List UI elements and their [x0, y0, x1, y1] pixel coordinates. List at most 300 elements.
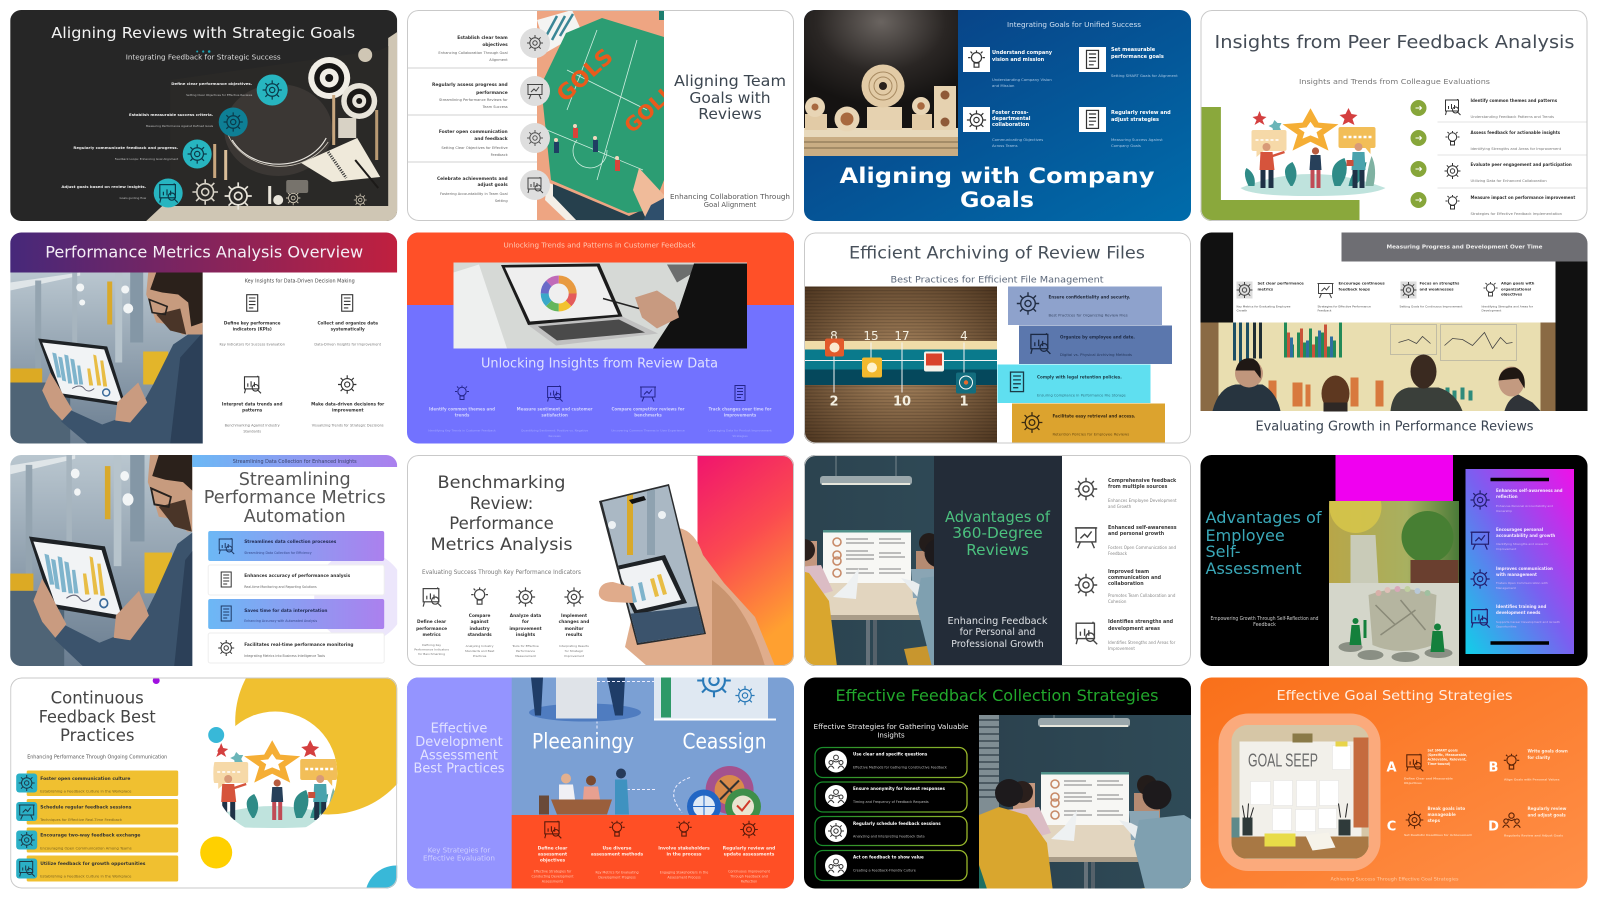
card: time savings: Enhancing Accuracy with Automated Analysis — [244, 619, 317, 623]
goal list: Streamlining Performance Reviews for — [439, 98, 508, 102]
header band — [10, 232, 397, 272]
header text: Measuring Progress and Development Over Time — [1386, 244, 1543, 250]
practice list: Assessments — [542, 880, 564, 884]
card: confidentiality — [1008, 286, 1162, 325]
metric list: industry — [469, 626, 490, 632]
card: open culture: Establishing a Feedback Culture in the Workplace — [40, 790, 132, 794]
letters: B — [1489, 760, 1498, 776]
insight list: Track changes over time for — [709, 406, 772, 412]
practice list: Reflection — [741, 880, 757, 884]
card: confidentiality: Ensure confidentiality and security. — [1048, 294, 1131, 300]
card: confidentiality: Best Practices for Organizing Review Files — [1048, 312, 1128, 318]
slide: Efficient Archiving of Review Files — [804, 232, 1191, 444]
black frame blocks — [1200, 232, 1588, 411]
illustration: desk with targets, gears and notebook — [146, 32, 397, 221]
title: Aligning Team — [674, 72, 786, 90]
goal list: performance goals — [1111, 54, 1164, 60]
advantage list: Fosters Open Communication with — [1496, 581, 1548, 585]
metric list: Data-Driven Insights for Improvement — [314, 342, 382, 346]
advantage list: collaboration — [1108, 581, 1144, 587]
practice list: Effective Strategies for — [534, 870, 572, 874]
metric list: Performance Indicators — [414, 648, 449, 652]
photo: timeline on wood: 10 — [893, 394, 911, 410]
title: Evaluating Growth in Performance Reviews — [1256, 418, 1534, 434]
metric list: Set clear performance — [1258, 282, 1304, 286]
arrow buttons — [1410, 100, 1426, 208]
metric list: Define key performance — [224, 320, 281, 326]
card: retrieval: Facilitate easy retrieval and access. — [1052, 414, 1136, 418]
title — [1206, 508, 1322, 578]
practice list: update assessments — [724, 852, 775, 858]
strategy list: Set SMART goals — [1428, 748, 1458, 752]
letters: D — [1488, 820, 1499, 834]
photo: meeting room — [919, 675, 1209, 900]
card: accuracy — [208, 565, 384, 595]
strategy list — [852, 752, 947, 872]
card: organize — [1019, 326, 1172, 364]
goal list: Alignment — [489, 58, 508, 62]
title: Performance Metrics Analysis Overview — [45, 242, 363, 262]
advantage list: Cohesion — [1108, 599, 1127, 604]
advantage list: Identifying Strengths and Areas for — [1496, 542, 1549, 546]
practice list: assessment methods — [591, 852, 644, 858]
metric list: metrics — [423, 632, 441, 638]
metric list: Interpreting Results — [559, 644, 589, 648]
metric list: standards — [467, 632, 492, 638]
practice list: Conducting Development — [531, 874, 574, 878]
title: Automation — [244, 507, 346, 527]
card: real-time: Integrating Metrics into Business Intelligence Tools — [244, 654, 325, 658]
goal list: Team Success — [482, 105, 508, 109]
goal icons — [520, 28, 550, 200]
title: Reviews — [698, 105, 762, 123]
metric list: Defining Key — [422, 643, 441, 647]
title: Review: — [470, 494, 533, 513]
bottom band — [512, 815, 795, 889]
advantage list: communication and — [1108, 575, 1162, 581]
goal list — [432, 35, 509, 203]
goal list — [61, 81, 253, 200]
subtitle: Best Practices for Efficient File Management — [890, 276, 1104, 286]
header band — [192, 455, 397, 467]
insight list: Leveraging Data for Product Improvement — [708, 428, 773, 432]
metric list: Improvement — [564, 654, 585, 658]
metric list: Visualizing Trends for Strategic Decisions — [312, 424, 384, 428]
goal list: Understanding Company Vision — [992, 77, 1052, 82]
title: Self- — [1206, 542, 1240, 561]
subtitle: Goal Alignment — [704, 201, 757, 209]
goal list: Set measurable — [1111, 47, 1156, 53]
metric list: Key Metrics for Evaluating Employee — [1236, 304, 1291, 308]
advantage list: development areas — [1108, 626, 1160, 632]
advantage list: Feedback — [1108, 551, 1128, 556]
metric list: systematically — [331, 326, 365, 332]
photo frame — [1218, 714, 1380, 871]
photo: figures and crumpled paper — [1329, 481, 1459, 666]
title: Streamlining — [239, 470, 351, 490]
metric list: monitor — [564, 626, 584, 632]
card: open culture — [16, 770, 178, 796]
title: Aligning Reviews with Strategic Goals — [51, 24, 355, 42]
practice list: Define clear — [538, 846, 568, 852]
goal list: Celebrate achievements and — [437, 176, 508, 182]
metric list: Implement — [561, 613, 587, 619]
advantage list: from multiple sources — [1108, 484, 1167, 490]
goal list: Enhancing Collaboration Through Goal — [438, 51, 508, 55]
title: Reviews — [966, 541, 1029, 559]
advantage list: Improved team — [1108, 569, 1149, 575]
advantage list: Fosters Open Communication and — [1108, 545, 1176, 550]
strategy list: manageable — [1428, 812, 1456, 817]
illustration: goals football pitch: GOLS — [552, 44, 619, 107]
card: two-way exchange: Encourage two-way feedback exchange — [40, 832, 140, 838]
card: growth — [16, 856, 178, 882]
metric icons — [423, 587, 584, 607]
illustration: planning scene — [529, 664, 776, 824]
insight list: satisfaction — [541, 412, 568, 418]
subtitle: Insights — [877, 732, 905, 740]
practice list — [531, 846, 775, 884]
slide: Aligning with Company Goals — [804, 10, 1191, 221]
subtitle: Evaluating Success Through Key Performance Indicators — [422, 569, 581, 576]
goal list: Setting SMART Goals for Alignment — [1111, 73, 1178, 78]
insight list — [428, 406, 773, 438]
title: Performance Metrics — [204, 488, 386, 508]
goal list: performance — [476, 90, 508, 96]
title: Goals with — [689, 89, 771, 107]
letters: A — [1386, 760, 1397, 776]
insight list: Measure sentiment and customer — [517, 406, 593, 412]
metric list: Interpret data trends and — [222, 402, 282, 406]
slide: Insights from Peer Feedback Analysis — [1200, 10, 1588, 221]
photo: hand holding phone — [597, 480, 775, 666]
metric list: Focus on strengths — [1420, 282, 1460, 286]
advantage list: Enhances self-awareness and — [1496, 488, 1563, 493]
title: Efficient Archiving of Review Files — [849, 244, 1145, 264]
gradient panel — [698, 455, 794, 666]
goal list: departmental — [992, 116, 1031, 122]
advantage list: and Growth — [1108, 504, 1132, 509]
metric list: Growth — [1236, 308, 1247, 312]
subtitle — [423, 846, 495, 862]
card: data collection: Streamlines data collection processes — [244, 539, 337, 545]
goal list: adjust strategies — [1111, 117, 1159, 123]
metric list: Identifying Strengths and Areas for — [1482, 304, 1534, 308]
advantage list: Promotes Team Collaboration and — [1108, 593, 1176, 598]
goal list: Establish clear team — [457, 35, 508, 41]
strategy list: Act on feedback to show value — [853, 854, 924, 860]
photo: timeline on wood: 8 — [830, 329, 838, 343]
insight list: Identifying Strengths and Areas for Improvement — [1470, 147, 1562, 151]
practice list: Continuous Improvement — [728, 870, 771, 874]
pagination dots — [196, 50, 210, 53]
metric list: Benchmarking Against Industry — [225, 424, 280, 428]
practice list: Engaging Stakeholders in the — [660, 870, 708, 874]
insight list: Identify common themes and — [429, 406, 495, 412]
goal list: and feedback — [474, 136, 508, 142]
item frames — [815, 748, 967, 880]
panel bars — [1490, 480, 1549, 643]
photo: laptop with pie chart — [454, 262, 747, 348]
strategy list: Use clear and specific questions — [853, 752, 928, 756]
goal list: and Mission — [992, 83, 1015, 88]
insight list: Compare competitor reviews for — [612, 406, 685, 412]
header band — [1342, 232, 1588, 262]
title — [414, 722, 505, 776]
subtitle: Enhancing Collaboration Through — [670, 193, 790, 201]
strategy list: Timing and Frequency of Feedback Requests — [852, 800, 929, 804]
insight list: Identifying Key Trends in Customer Feedback — [428, 428, 496, 432]
strategy list: Objectives — [1404, 781, 1422, 785]
metric list: improvement — [509, 626, 542, 632]
strategy list: Regularly Review and Adjust Goals — [1504, 834, 1563, 838]
goal list: Regularly assess progress and — [432, 82, 508, 88]
insight list: improvements — [724, 412, 757, 418]
advantage list — [1108, 478, 1177, 651]
subtitle: Enhancing Feedback — [948, 616, 1048, 627]
subtitle: Key Insights for Data-Driven Decision Making — [245, 278, 355, 284]
goal list: Define clear performance objectives. — [171, 81, 253, 86]
title: Continuous — [51, 688, 144, 708]
title: Development — [415, 735, 503, 750]
metric list: insights — [516, 632, 536, 638]
subtitle — [948, 616, 1048, 650]
slide: Unlocking Insights from Review Data — [407, 232, 794, 444]
photo: engineer with tablet — [10, 272, 203, 444]
magenta block — [1336, 455, 1453, 501]
slide: Aligning Team Goals with Reviews — [407, 10, 794, 221]
subtitle: Professional Growth — [951, 639, 1044, 650]
title: Insights from Peer Feedback Analysis — [1214, 32, 1574, 53]
metric list: changes and — [559, 619, 589, 625]
title: 360-Degree — [952, 524, 1043, 542]
goal list: Setting Clear Objectives for Effective Reviews — [186, 93, 253, 97]
metric list: Setting Goals for Continuous Improvement — [1400, 304, 1463, 308]
metric list: Collect and organize data — [317, 320, 378, 326]
advantage list: Encourages personal — [1496, 527, 1544, 532]
subtitle: for Personal and — [960, 627, 1035, 638]
title: Effective Goal Setting Strategies — [1276, 688, 1512, 704]
card: legal retention: Ensuring Compliance in Performance File Storage — [1037, 394, 1127, 398]
advantage list: Ownership — [1496, 509, 1512, 513]
strategy list: Effective Methods for Gathering Constructive Feedback — [853, 766, 947, 770]
metric list — [219, 320, 385, 434]
strategy list: Analyzing and Interpreting Feedback Data — [853, 834, 925, 838]
goal list: Setting — [495, 199, 508, 203]
metric list: feedback loops — [1338, 288, 1371, 292]
icons — [455, 386, 745, 402]
subtitle: Effective Evaluation — [423, 854, 495, 862]
title: Best Practices — [414, 762, 505, 776]
title — [39, 688, 156, 745]
metric list: Analyze data — [510, 613, 541, 619]
strategy list: Creating a Feedback-Friendly Culture — [853, 868, 916, 872]
insight list: Utilizing Data for Enhanced Collaboration — [1470, 179, 1547, 183]
practice list: Through Feedback and — [729, 874, 768, 878]
slide: Advantages of Employee Self-Assessment — [1200, 455, 1588, 666]
slide: Evaluating Growth in Performance Reviews — [1200, 232, 1588, 444]
divider rows — [407, 68, 537, 162]
title — [945, 508, 1051, 559]
metric list: Standards and Best — [465, 649, 495, 653]
goal list: Across Teams — [992, 143, 1018, 148]
subtitle — [670, 193, 790, 209]
card: time savings: Saves time for data interpretation — [244, 608, 327, 614]
insight list: Strategies for Effective Feedback Implementation — [1470, 212, 1563, 216]
illustration: colleagues and star — [202, 740, 347, 828]
advantage list: Comprehensive feedback — [1108, 478, 1177, 484]
metric list — [1236, 282, 1535, 312]
card: real-time: Facilitates real-time performance monitoring — [244, 642, 353, 648]
slide: Effective Goal Setting Strategies — [1200, 678, 1588, 888]
decorative lavender circle — [314, 551, 406, 643]
card: organize: Organize by employee and date. — [1060, 334, 1135, 340]
strategy list: and adjust goals — [1528, 812, 1566, 818]
goal list: vision and mission — [992, 57, 1045, 63]
practice list: assessment — [538, 852, 567, 858]
item icons — [825, 750, 847, 876]
insight list: trends — [455, 412, 470, 418]
letters — [1386, 760, 1499, 834]
subtitle: Integrating Feedback for Strategic Success — [126, 54, 281, 62]
photo: timeline on wood: 2 — [829, 394, 839, 410]
photo: timeline on wood — [804, 286, 997, 444]
title: Feedback Best — [39, 708, 156, 726]
advantage icons — [1075, 478, 1097, 644]
goal list: Feedback Loops: Enhancing Goal Alignment — [115, 157, 179, 161]
insight list: Evaluate peer engagement and participation — [1470, 162, 1572, 167]
goal list: objectives — [482, 42, 508, 48]
advantage list: Supports Career Development and Growth — [1496, 620, 1560, 624]
metric list: objectives — [1501, 292, 1523, 296]
card: legal retention: Comply with legal retention policies. — [1037, 374, 1122, 380]
metric list: improvement — [332, 408, 363, 412]
advantage list: Improvement — [1108, 646, 1135, 651]
metric list: indicators (KPIs) — [233, 326, 272, 332]
metric list: Define clear — [417, 619, 447, 625]
card: regular sessions: Schedule regular feedback sessions — [40, 804, 132, 810]
advantage list: Opportunities — [1496, 624, 1517, 628]
strategy list: steps — [1428, 818, 1441, 823]
subtitle: Unlocking Trends and Patterns in Customer Feedback — [504, 242, 696, 250]
strategy list: Break goals into — [1428, 806, 1465, 811]
metric list: Strategies for Effective Performance — [1318, 304, 1371, 308]
advantage list: Identifies strengths and — [1108, 619, 1174, 625]
goal list: Setting Clear Objectives for Effective — [441, 146, 508, 150]
card: regular sessions — [16, 799, 178, 824]
card: growth: Establishing a Feedback Culture in the Workplace — [40, 874, 132, 878]
title: Effective — [431, 722, 487, 736]
title: Performance — [449, 514, 554, 533]
insight list: Measure impact on performance improvement — [1470, 195, 1575, 200]
card: retrieval: Retention Policies for Employee Reviews — [1052, 432, 1129, 436]
goal list: Foster cross- — [992, 110, 1029, 116]
advantage icons — [1470, 490, 1490, 628]
insight list: Quantifying Sentiment: Positive vs. Negative — [521, 428, 588, 432]
list icons — [1444, 99, 1460, 209]
metric list: patterns — [242, 408, 263, 412]
title: Advantages of — [945, 508, 1051, 526]
subtitle: Effective Strategies for Gathering Valuable — [814, 723, 968, 731]
title: Benchmarking — [438, 473, 566, 492]
strategy list — [1404, 748, 1568, 838]
title: Goals — [960, 188, 1034, 213]
photo: timeline on wood: 17 — [894, 329, 910, 343]
slide: Performance Metrics Analysis Overview — [10, 232, 397, 444]
illustration: planning scene: Ceassign — [682, 730, 766, 754]
strategy list: Regularly schedule feedback sessions — [853, 821, 941, 826]
metric list: Key Indicators for Success Evaluation — [219, 342, 285, 346]
title: Assessment — [420, 748, 498, 764]
strategy list: Align Goals with Personal Values — [1504, 778, 1560, 782]
goal list: Company Goals — [1111, 143, 1141, 148]
insight list: benchmarks — [634, 412, 662, 418]
strategy list: Achievable, Relevant, — [1428, 757, 1467, 761]
strategy list: Regularly review — [1528, 806, 1567, 811]
photo: wooden targets — [804, 10, 958, 156]
slide: Streamlining Performance Metrics Automation — [0, 455, 406, 666]
card: two-way exchange: Encouraging Open Communication Among Teams — [40, 846, 132, 850]
title: Unlocking Insights from Review Data — [481, 356, 718, 372]
slide: Effective Development Assessment Best Practices — [407, 664, 795, 889]
title — [430, 473, 572, 554]
metric list — [414, 613, 589, 658]
strategy list: Write goals down — [1528, 748, 1568, 754]
slide: Continuous Feedback Best Practices — [10, 628, 427, 900]
metric list: results — [566, 632, 583, 638]
metric list: and weaknesses — [1420, 288, 1454, 292]
metric list: organizational — [1501, 288, 1531, 292]
practice list: Key Metrics for Evaluating — [595, 870, 639, 874]
metric list: Measurement — [515, 654, 537, 658]
title: Effective Feedback Collection Strategies — [836, 686, 1158, 705]
advantage list: Improves communication — [1496, 566, 1553, 571]
footer text: Achieving Success Through Effective Goal Strategies — [1330, 876, 1459, 882]
photo: engineer with tablet — [0, 455, 211, 666]
metric list: for — [522, 619, 530, 625]
decorative shapes — [153, 628, 427, 900]
metric icons — [244, 295, 356, 394]
subtitle: Enhancing Performance Through Ongoing Communication — [27, 754, 167, 760]
insight list — [1470, 98, 1575, 216]
advantage list — [1496, 488, 1563, 628]
goal list: collaboration — [992, 122, 1030, 128]
advantage list: development needs — [1496, 610, 1541, 615]
letters: C — [1387, 820, 1396, 834]
insight list: Assess feedback for actionable insights — [1470, 130, 1561, 135]
goal list: Feedback — [491, 153, 509, 157]
advantage list: Enhanced self-awareness — [1108, 525, 1177, 531]
photo: goal whiteboard: GOAL SEEP — [1248, 750, 1318, 770]
advantage list: Improvement — [1496, 547, 1517, 551]
card: regular sessions: Techniques for Effective Real-Time Feedback — [39, 818, 123, 822]
left panel — [407, 678, 512, 888]
card: accuracy: Real-time Monitoring and Reporting Solutions — [244, 585, 317, 589]
strategy list: Define Clear and Measurable — [1404, 776, 1453, 780]
strategy list: for clarity — [1528, 755, 1551, 760]
illustration: goals football pitch: GOLL — [619, 80, 679, 138]
strategy list: Time-bound) — [1428, 762, 1451, 766]
title: Practices — [60, 726, 134, 745]
metric list: Development — [1482, 308, 1502, 312]
slide: Aligning Reviews with Strategic Goals — [10, 10, 397, 221]
card: accuracy: Enhances accuracy of performance analysis — [244, 573, 351, 579]
metric list: Standards — [243, 430, 261, 434]
advantage list: Identifies training and — [1496, 604, 1546, 609]
slide: Benchmarking Review — [407, 455, 794, 666]
card: growth: Utilize feedback for growth opportunities — [40, 861, 146, 867]
metric list: performance — [416, 626, 447, 632]
